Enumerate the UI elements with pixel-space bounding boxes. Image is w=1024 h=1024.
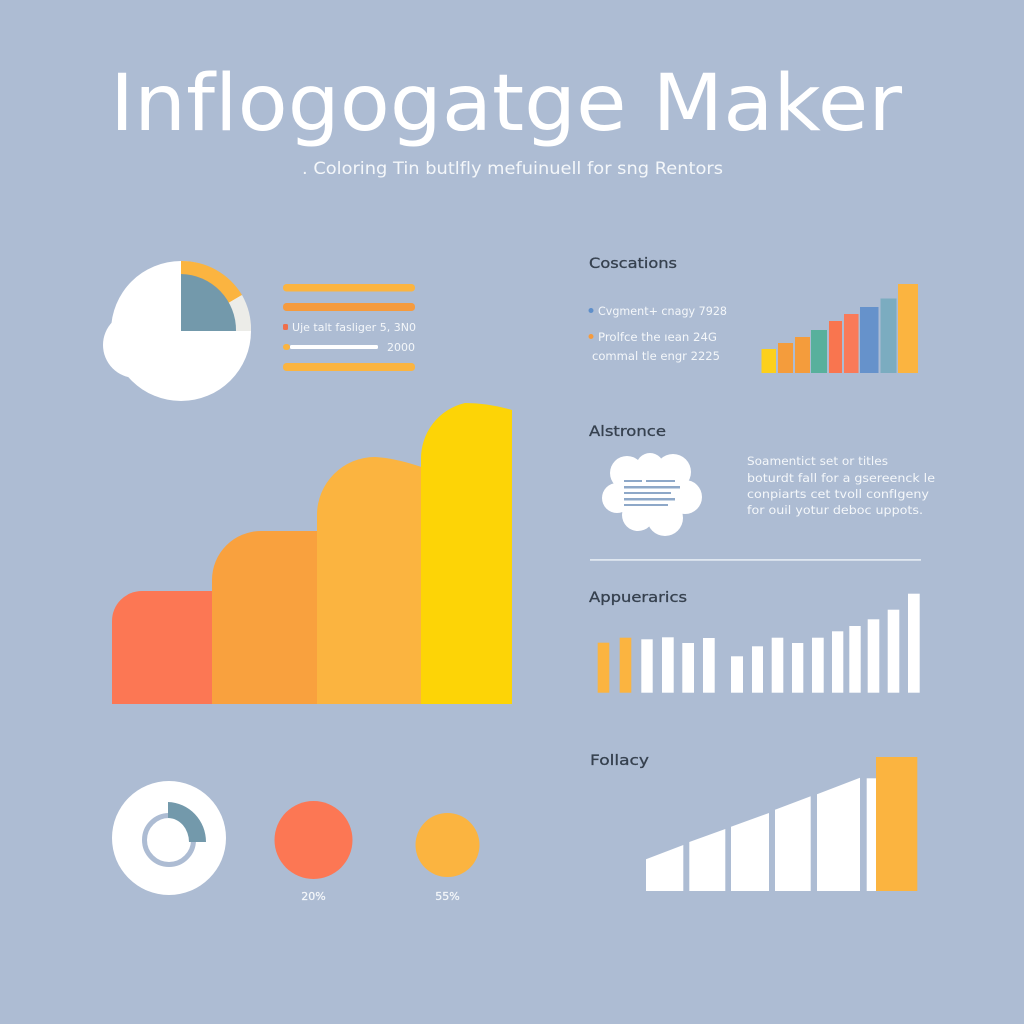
orange stat circle <box>416 813 480 903</box>
bullet list: Prolfce the ıean 24G <box>598 330 717 344</box>
heading: Appuerarics <box>589 590 687 606</box>
title: Inflogogatge Maker <box>110 59 903 149</box>
heading: Alstronce <box>589 424 666 440</box>
panel: bottom circles <box>112 781 480 903</box>
heading: Coscations <box>589 256 677 272</box>
description text: boturdt fall for a gsereenck le <box>747 471 935 485</box>
donut gauge <box>112 781 226 895</box>
rising wedge bar chart <box>646 757 917 891</box>
red stat circle: 20% <box>301 890 326 903</box>
bullet list: commal tle engr 2225 <box>592 349 720 363</box>
pie chart <box>103 261 251 401</box>
legend bars and labels <box>283 284 416 371</box>
heading: Follacy <box>590 753 649 769</box>
red stat circle <box>274 801 352 903</box>
multicolor bar chart <box>762 284 918 373</box>
panel: Alstronce <box>589 424 935 536</box>
legend bars and labels: Uje talt fasliger 5, 3N0 <box>292 321 416 334</box>
icon: cloud with text lines <box>602 453 702 536</box>
panel: Follacy <box>590 753 917 891</box>
description text: for ouil yotur deboc uppots. <box>747 503 923 517</box>
bullet list <box>588 304 727 363</box>
description text: Soamentict set or titles <box>747 454 888 468</box>
orange stat circle: 55% <box>435 890 460 903</box>
subtitle: . Coloring Tin butlfly mefuinuell for sng Rentors <box>302 159 723 179</box>
legend bars and labels: 2000 <box>387 341 415 354</box>
panel: Coscations <box>588 256 918 373</box>
description text <box>747 454 935 517</box>
bullet list: Cvgment+ cnagy 7928 <box>598 304 727 318</box>
large stepped area chart <box>112 403 512 704</box>
description text: conpiarts cet tvoll confIgeny <box>747 487 929 501</box>
panel: Appuerarics <box>589 590 920 693</box>
panel: pie chart and legend <box>103 261 416 401</box>
column chart <box>598 594 920 693</box>
